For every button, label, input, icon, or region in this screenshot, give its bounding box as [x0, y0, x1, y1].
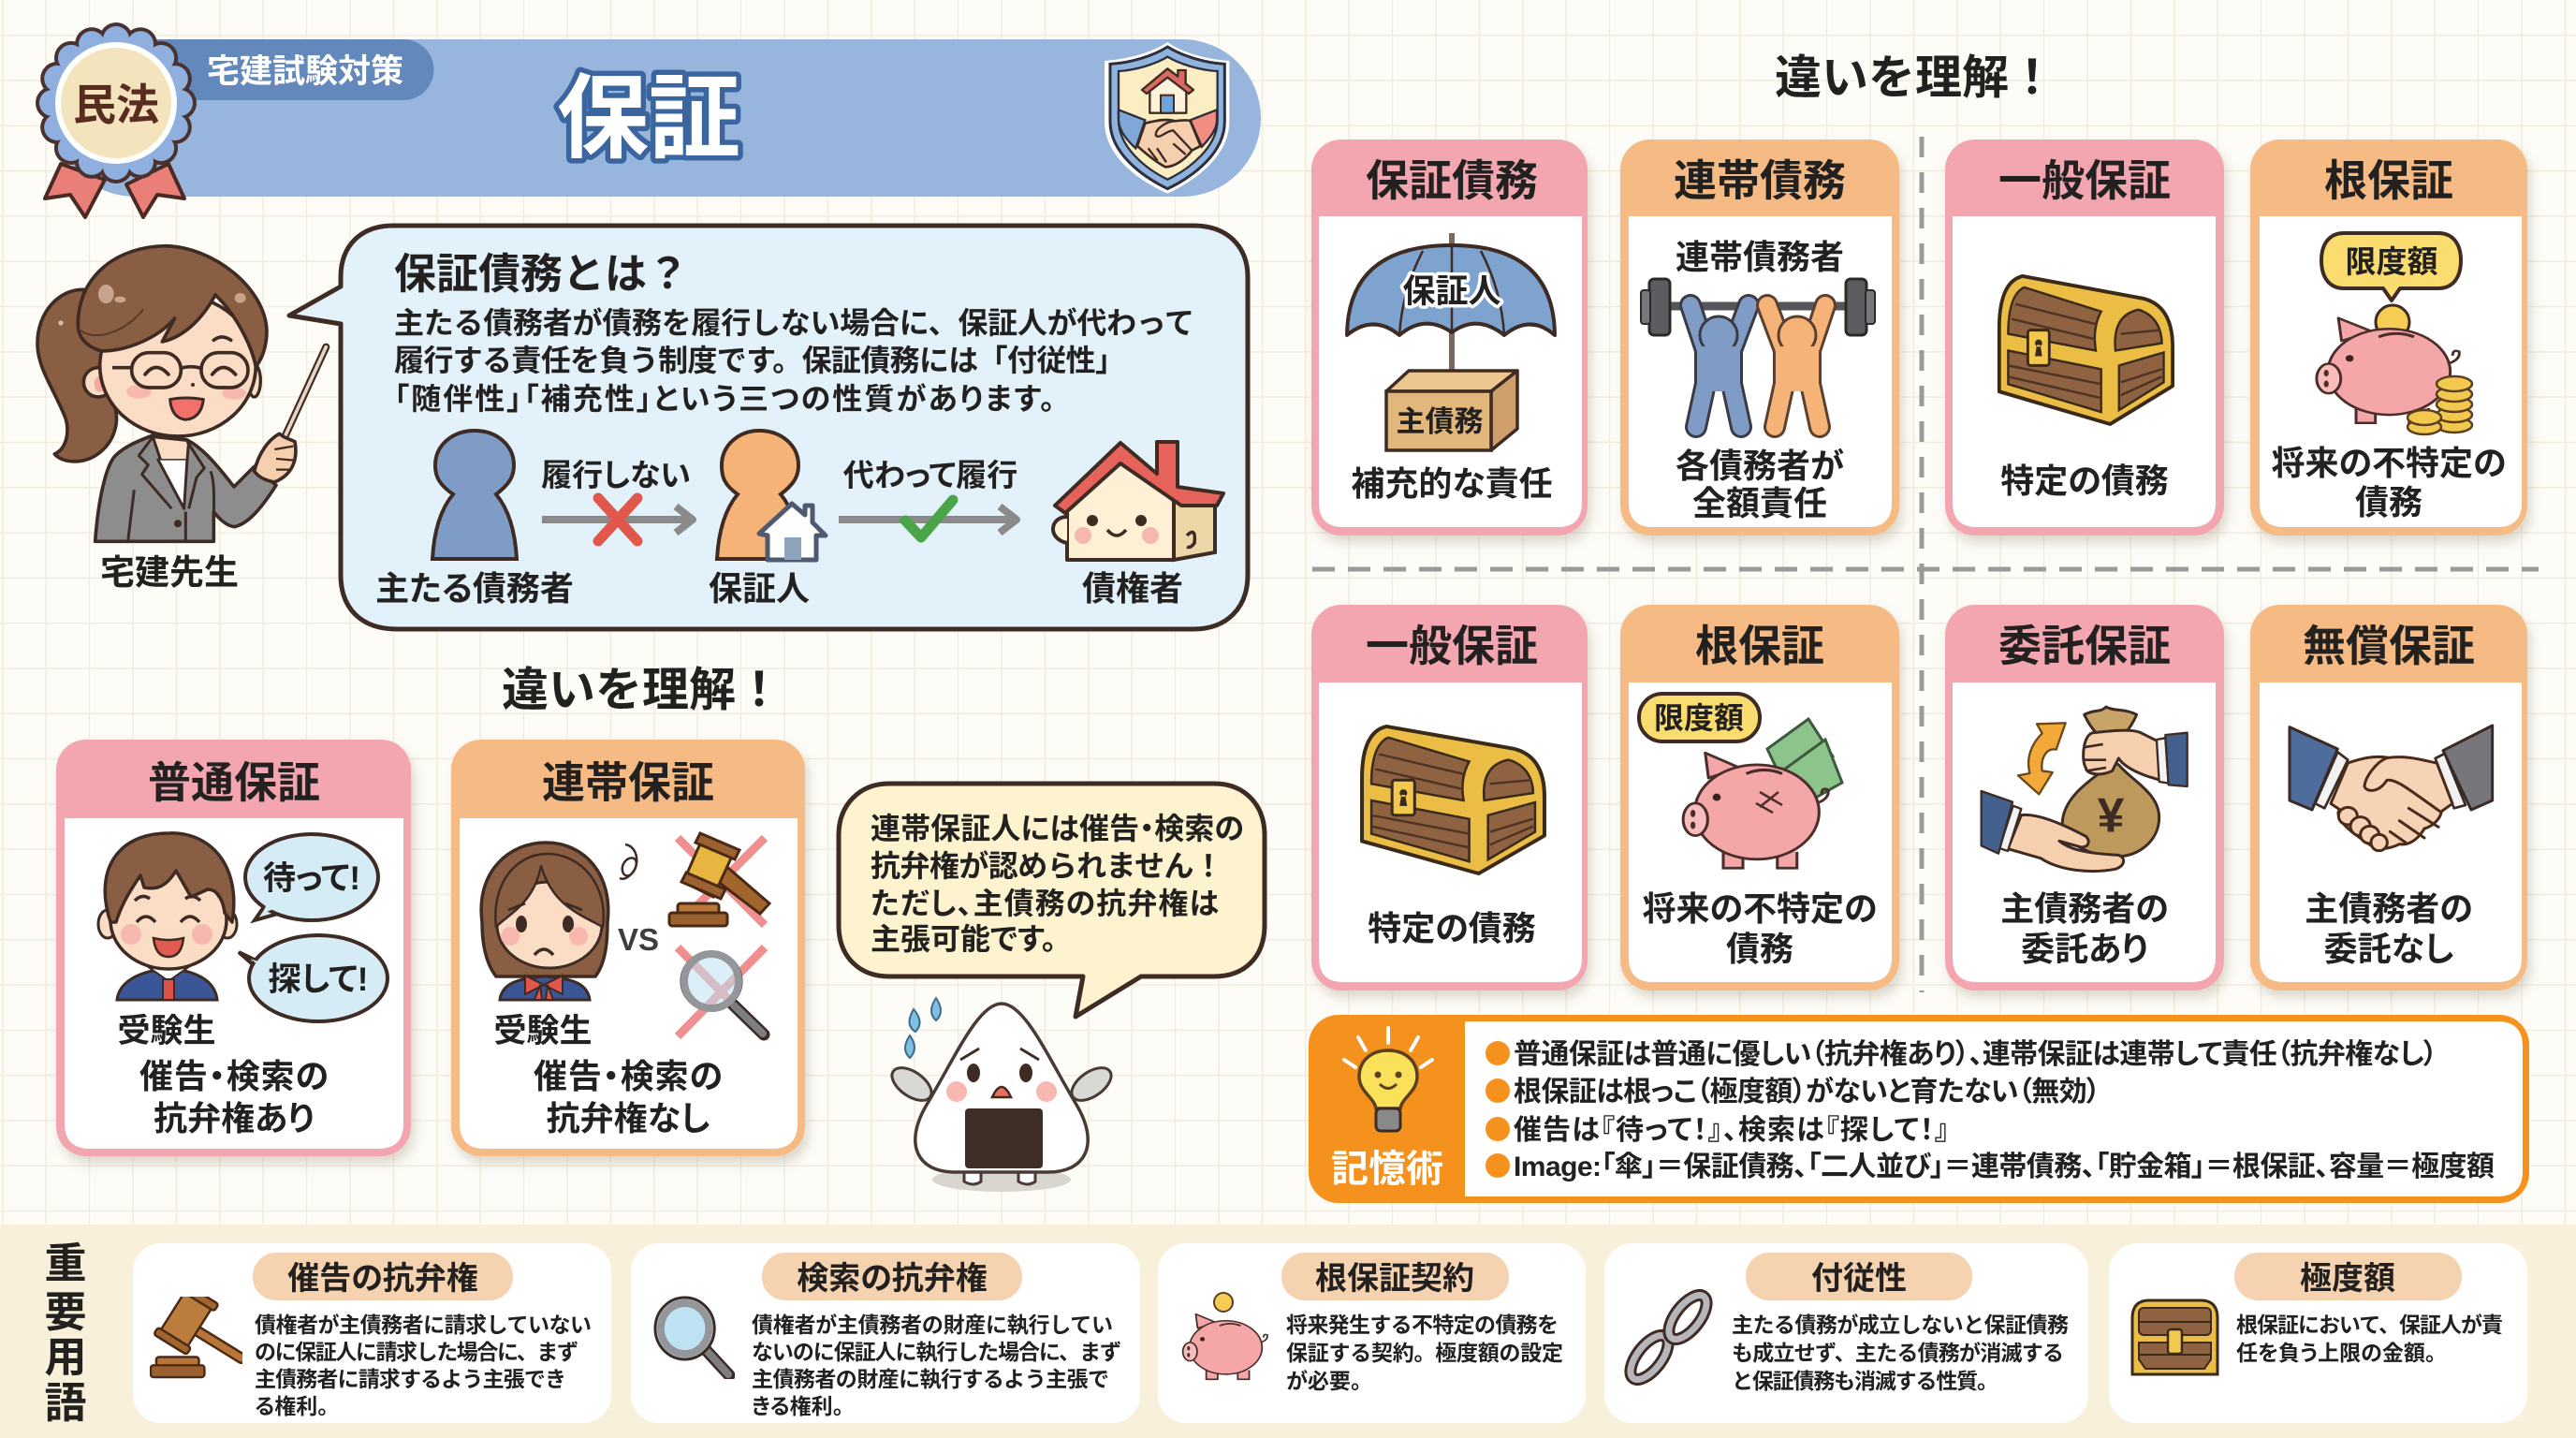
- card title: 根保証: [1695, 622, 1824, 670]
- badge: 民法 rosette: 民法: [73, 81, 159, 129]
- icon: guarantor: [717, 431, 826, 560]
- face: [100, 295, 256, 436]
- term: 検索の抗弁権: ないのに保証人に執行した場合に、まず: [752, 1340, 1121, 1364]
- card title: 一般保証: [1366, 622, 1538, 670]
- glasses: [112, 337, 248, 388]
- card caption: 将来の不特定の: [2271, 444, 2507, 482]
- teacher label: 宅建先生: [100, 553, 239, 592]
- bubble: 探して: [239, 935, 388, 1021]
- face: [967, 1064, 980, 1082]
- card caption: 補充的な責任: [1351, 464, 1553, 503]
- card: 根保証 top: [2250, 139, 2527, 536]
- text: vs: VS: [618, 922, 659, 957]
- bubble: 待って: 待って!: [263, 860, 360, 897]
- upper hand: [2084, 730, 2165, 782]
- card: 普通保証: [56, 740, 411, 1156]
- subject pill: 宅建試験対策: [207, 53, 403, 90]
- term: 催告の抗弁権: のに保証人に請求した場合に、まず: [255, 1340, 578, 1364]
- icon: shield handshake: [1105, 42, 1229, 194]
- card caption: 主債務者の: [2305, 889, 2473, 928]
- ears: [83, 368, 113, 397]
- term: 付従性: と保証債務も消滅する性質。: [1732, 1369, 1998, 1393]
- card caption: 特定の債務: [1368, 909, 1536, 947]
- body text: [394, 306, 1194, 416]
- term: 付従性: 付従性: [1811, 1261, 1907, 1297]
- icon: crossed magnifier: [678, 947, 765, 1036]
- term: 付従性: も成立せず、主たる債務が消滅する: [1732, 1341, 2064, 1365]
- term: 催告の抗弁権: 主債務者に請求するよう主張でき: [255, 1367, 566, 1391]
- card caption: [534, 1057, 723, 1137]
- card caption: 将来の不特定の: [1642, 889, 1878, 928]
- arrow with check: [839, 500, 1017, 537]
- icon: crossed gavel: [669, 833, 769, 926]
- icon: piggy with bills: [1683, 719, 1842, 868]
- label: no performance: 履行しない: [541, 458, 691, 492]
- divider lines: [1312, 137, 2539, 992]
- student label: 受験生: [117, 1013, 216, 1049]
- card title: 一般保証: [1998, 156, 2171, 205]
- card caption: [1676, 447, 1844, 522]
- tag: limit: 限度額: [1654, 701, 1744, 735]
- badge: 民法 rosette: [45, 37, 184, 217]
- card title: 委託保証: [1998, 622, 2171, 670]
- card title: 無償保証: [2303, 622, 2475, 670]
- icon: magnifier: [655, 1298, 729, 1375]
- ribbon tails: [45, 164, 184, 217]
- bubble shape: [289, 226, 1248, 629]
- banner band: [56, 39, 1261, 197]
- body text: 主たる債務者が債務を履行しない場合に、保証人が代わって: [394, 306, 1194, 340]
- arms: [886, 1062, 937, 1107]
- card caption: 全額責任: [1692, 484, 1827, 522]
- card: 保証債務: [1311, 139, 1588, 536]
- card caption: 主債務者の: [2000, 889, 2169, 928]
- hair: [78, 246, 267, 367]
- mouth: [170, 398, 203, 419]
- card title: 連帯債務: [1674, 156, 1846, 205]
- card caption: [2271, 444, 2507, 521]
- term: 極度額: 任を負う上限の金額。: [2236, 1341, 2436, 1365]
- body: [915, 1004, 1088, 1172]
- term: 根保証契約: [1158, 1243, 1586, 1423]
- callout: rice ball speech: ただし、主債務の抗弁権は: [871, 887, 1219, 920]
- term: 催告の抗弁権: 催告の抗弁権: [287, 1261, 478, 1297]
- term: 根保証契約: 将来発生する不特定の債務を: [1286, 1313, 1559, 1337]
- term: 根保証契約: が必要。: [1286, 1369, 1361, 1393]
- card caption: [1642, 889, 1878, 968]
- glossary heading: [44, 1240, 87, 1427]
- card caption: [139, 1057, 329, 1137]
- icon: umbrella over box: [1347, 233, 1555, 450]
- label: debtor: 主たる債務者: [375, 569, 574, 608]
- card caption: 抗弁権あり: [154, 1099, 315, 1137]
- card: 一般保証 top: [1945, 139, 2224, 536]
- icon: debtor: [432, 431, 517, 559]
- card: 連帯保証: [451, 740, 805, 1156]
- term: 検索の抗弁権: 主債務者の財産に執行するよう主張で: [752, 1367, 1109, 1391]
- label: performs instead: 代わって履行: [843, 458, 1017, 492]
- mnemonic label: 記憶術: [1331, 1149, 1443, 1190]
- icon: light bulb: [1344, 1028, 1432, 1131]
- panel: glossary: [0, 1225, 2576, 1438]
- term: 催告の抗弁権: る権利。: [255, 1394, 329, 1418]
- callout: rice ball speech: 抗弁権が認められません！: [871, 849, 1223, 883]
- hand: [255, 433, 296, 482]
- lower hand: [2008, 814, 2124, 872]
- card caption: 各債務者が: [1676, 447, 1844, 485]
- icon: piggy bank: [1183, 1293, 1267, 1379]
- icon: worried student: [481, 843, 637, 1000]
- callout: rice ball speech: 主張可能です。: [871, 922, 1057, 956]
- glossary heading: 要: [44, 1288, 87, 1336]
- header banner: [56, 39, 1261, 197]
- body text: 履行する責任を負う制度です。保証債務には「付従性」: [394, 344, 1125, 377]
- card: 一般保証 bottom: [1311, 605, 1588, 990]
- term: 付従性: 主たる債務が成立しないと保証債務: [1732, 1313, 2069, 1337]
- pointer: [285, 347, 326, 435]
- card caption: 特定の債務: [2000, 462, 2169, 500]
- body text: 「随伴性」「補充性」という三つの性質があります。: [394, 382, 1055, 416]
- bubble: 探して: 探して!: [269, 961, 368, 998]
- legs: [964, 1165, 1035, 1184]
- tag: limit: [1639, 694, 1760, 741]
- icon: treasure chest front: [2132, 1300, 2217, 1374]
- icon: chest: [1999, 276, 2173, 424]
- term: 極度額: [2109, 1243, 2527, 1423]
- card caption: [2000, 889, 2169, 968]
- card: 根保証 bottom: [1620, 605, 1899, 990]
- card title: 連帯保証: [542, 758, 714, 807]
- card caption: 債務: [2355, 483, 2422, 521]
- card caption: 抗弁権なし: [547, 1099, 710, 1137]
- panel: mnemonic: [1309, 1015, 2529, 1203]
- drops: [905, 998, 941, 1058]
- icon: hands exchanging money bag: ¥: [2098, 787, 2125, 842]
- jacket: [95, 435, 276, 541]
- card caption: 委託あり: [2021, 930, 2148, 968]
- term: 催告の抗弁権: [133, 1243, 611, 1423]
- card title: 保証債務: [1366, 156, 1538, 205]
- term: 検索の抗弁権: 債権者が主債務者の財産に執行してい: [752, 1313, 1113, 1337]
- term: 付従性: [1604, 1243, 2088, 1423]
- term: 検索の抗弁権: 検索の抗弁権: [797, 1261, 988, 1297]
- card caption: [2305, 889, 2473, 968]
- card: 委託保証: [1945, 605, 2224, 990]
- card frame: [451, 740, 805, 1156]
- term: 極度額: 根保証において、保証人が責: [2236, 1313, 2503, 1337]
- icon: creditor house: [1053, 442, 1223, 560]
- term: 根保証契約: 保証する契約。極度額の設定: [1286, 1341, 1563, 1365]
- ponytail: [37, 289, 116, 462]
- bag: [2085, 707, 2137, 733]
- student label: 受験生: [493, 1013, 593, 1049]
- icon: smiling student: [98, 833, 237, 1000]
- icon: handshake: [2290, 726, 2493, 851]
- heading: 保証債務とは？: [394, 250, 689, 298]
- term: 検索の抗弁権: [631, 1243, 1140, 1423]
- card caption: 催告・検索の: [139, 1057, 329, 1095]
- bullets: [1486, 1041, 1510, 1178]
- callout: rice ball speech: [839, 784, 1265, 1017]
- tag: limit: 限度額: [2346, 244, 2437, 279]
- icon: umbrella over box: 主債務: [1397, 405, 1483, 438]
- mnemonic lines: 根保証は根っこ（極度額）がないと育たない（無効）: [1514, 1076, 2100, 1108]
- arrow: [2018, 723, 2066, 794]
- label: creditor: 債権者: [1082, 569, 1183, 608]
- character: rice ball: [886, 998, 1117, 1192]
- term: 極度額: 極度額: [2300, 1261, 2395, 1297]
- glossary heading: 語: [44, 1379, 87, 1427]
- term: 催告の抗弁権: 債権者が主債務者に請求していない: [255, 1313, 592, 1337]
- card caption: 催告・検索の: [534, 1057, 723, 1095]
- card title: 普通保証: [148, 758, 320, 807]
- glossary heading: 重: [44, 1240, 87, 1287]
- heading: right compare: 違いを理解！: [1775, 51, 2056, 104]
- mnemonic lines: 催告は『待って！』、検索は『探して！』: [1514, 1115, 1949, 1146]
- tag: limit: [2321, 233, 2461, 301]
- arrow with cross: [542, 498, 693, 541]
- label: guarantor: 保証人: [709, 569, 810, 608]
- icon: gavel: [151, 1284, 263, 1382]
- card: 無償保証: [2250, 605, 2527, 990]
- icon: piggy bank with coins: [2317, 305, 2472, 434]
- icon: chain: [1624, 1289, 1713, 1386]
- mnemonic lines: 普通保証は普通に優しい（抗弁権あり）、連帯保証は連帯して責任（抗弁権なし）: [1514, 1039, 2437, 1070]
- card frame: [56, 740, 411, 1156]
- card caption: 債務: [1726, 930, 1793, 968]
- icon: chest: [1362, 726, 1544, 873]
- heading: left compare: 違いを理解！: [502, 664, 783, 716]
- icon: umbrella over box: 保証人: [1402, 273, 1501, 310]
- mnemonic lines: Image:「傘」＝保証債務、「二人並び」＝連帯債務、「貯金箱」＝根保証、容量＝極度額: [1514, 1152, 2495, 1182]
- card: 連帯債務: [1620, 139, 1899, 536]
- title: 保証: [557, 66, 740, 169]
- character: teacher: [37, 246, 326, 541]
- term: 検索の抗弁権: きる権利。: [752, 1394, 843, 1418]
- callout: rice ball speech: 連帯保証人には催告・検索の: [871, 812, 1244, 845]
- term: 根保証契約: 根保証契約: [1315, 1261, 1474, 1297]
- glossary heading: 用: [44, 1333, 87, 1381]
- subject pill: [150, 39, 433, 100]
- mnemonic lines: [1514, 1039, 2495, 1182]
- card caption: 委託なし: [2324, 930, 2453, 968]
- icon: two lifters with barbell: [1641, 279, 1875, 427]
- card title: 根保証: [2324, 156, 2453, 205]
- label: 連帯債務者: [1676, 238, 1844, 276]
- panel: speech bubble explanation: [289, 226, 1248, 629]
- bubble: 待って: [245, 834, 378, 920]
- cheeks: [126, 385, 152, 399]
- icon: hands exchanging money bag: [1982, 707, 2188, 872]
